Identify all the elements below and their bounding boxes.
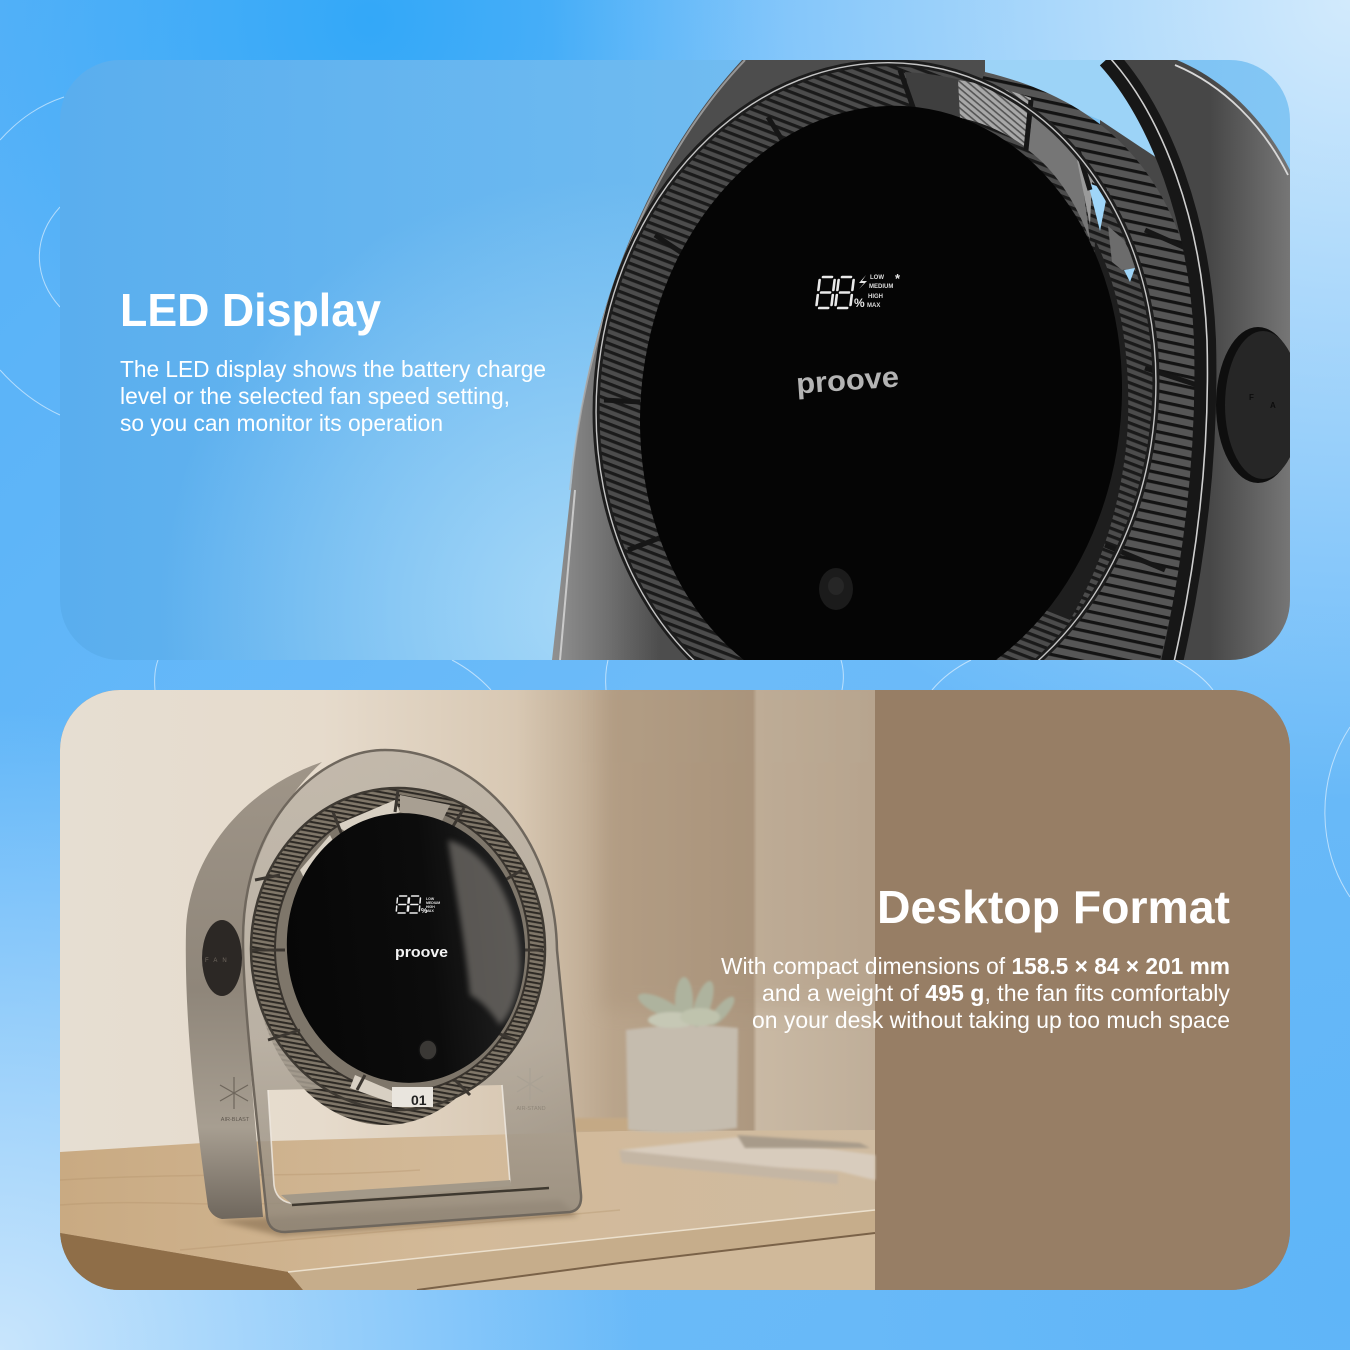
- counter tile: 01: [411, 1092, 427, 1108]
- desk left side: [60, 1233, 303, 1290]
- snowflake icon right: [516, 1068, 546, 1112]
- side knob: A: [1270, 401, 1276, 410]
- vanes: [604, 70, 1194, 572]
- counter tile: [392, 1087, 433, 1108]
- LED readout: [816, 271, 901, 310]
- fan close-up photo: [552, 60, 1290, 660]
- louver ring: [251, 788, 545, 1110]
- wall: [60, 690, 875, 1160]
- shadow on desk: [215, 1200, 578, 1236]
- plant pot: [626, 977, 738, 1133]
- black disc: [274, 801, 538, 1095]
- front ring rim: [592, 60, 1160, 660]
- lower shelf: [281, 1180, 512, 1204]
- panel: LED Display: [60, 60, 1290, 660]
- dark bezel: [1045, 240, 1128, 620]
- right hoop: [1108, 58, 1205, 662]
- sky window through arch: [985, 60, 1156, 157]
- front arch: [243, 750, 581, 1232]
- desk front edge: [288, 1210, 875, 1290]
- power button: [819, 568, 853, 610]
- LED readout: *: [895, 271, 901, 286]
- side knob: [1216, 327, 1290, 483]
- LED readout: HIGH: [868, 294, 883, 300]
- gaps showing sky: [1088, 183, 1135, 282]
- snowflake icon right: AIR-STAND: [516, 1106, 546, 1112]
- description: Desktop Format: and a weight of 495 g, the fan fits comfortably: [762, 980, 1230, 1006]
- rear drum louvers: [982, 72, 1194, 660]
- snowflake icon left: [220, 1077, 250, 1123]
- room photo: [60, 670, 1290, 1290]
- description: LED Display: The LED display shows the battery charge: [120, 356, 546, 382]
- LED readout: %: [421, 908, 428, 915]
- LED readout: MAX: [426, 909, 434, 913]
- rear arch: [186, 762, 322, 1219]
- LED readout: %: [854, 296, 865, 310]
- LED readout: MEDIUM: [869, 284, 893, 290]
- LED readout: [396, 896, 440, 915]
- black disc: [640, 106, 1122, 660]
- LED readout: MAX: [867, 303, 880, 309]
- disc reflection: [448, 840, 520, 1025]
- heading: Desktop Format: Desktop Format: [877, 881, 1230, 933]
- segments: [252, 790, 543, 1095]
- LED readout: LOW: [870, 275, 884, 281]
- description: Desktop Format: on your desk without taking up too much space: [752, 1007, 1230, 1033]
- upper ring sectors: [905, 72, 1138, 270]
- skirting: [575, 1118, 635, 1132]
- description: Desktop Format: [721, 953, 1230, 1033]
- LED readout: LOW: [426, 897, 435, 901]
- right edge of photo restored: [1230, 690, 1290, 1290]
- notebook: [619, 1137, 875, 1184]
- brown panel background: [60, 690, 1290, 1290]
- front arch rim: [243, 750, 581, 1232]
- fan body arch: [552, 60, 985, 660]
- description: LED Display: level or the selected fan speed setting,: [120, 383, 510, 409]
- description: LED Display: so you can monitor its operation: [120, 410, 443, 436]
- description: Desktop Format: With compact dimensions of 158.5 × 84 × 201 mm: [721, 953, 1230, 979]
- desk top: [60, 1130, 875, 1272]
- pen: [737, 1135, 870, 1148]
- heading: LED Display: LED Display: [120, 284, 381, 336]
- inner ring: [275, 806, 529, 1092]
- LED readout: MEDIUM: [426, 901, 440, 905]
- side knob: F: [1249, 393, 1254, 402]
- front ring: [600, 66, 1152, 660]
- panel background: [60, 60, 1290, 660]
- panel: Desktop Format: [60, 670, 1290, 1290]
- brand logo: proove: [395, 944, 448, 961]
- description: LED Display: [120, 356, 546, 436]
- side knob: [202, 920, 242, 996]
- glass sectors: [300, 795, 450, 1104]
- LED readout: HIGH: [426, 905, 435, 909]
- brand logo: proove: [795, 361, 900, 401]
- side knob: FAN: [205, 958, 232, 964]
- fan product photo: [186, 750, 581, 1236]
- drum: [262, 1014, 456, 1125]
- succulent: [635, 977, 738, 1029]
- snowflake icon left: AIR-BLAST: [221, 1117, 250, 1123]
- power button: [419, 1040, 437, 1060]
